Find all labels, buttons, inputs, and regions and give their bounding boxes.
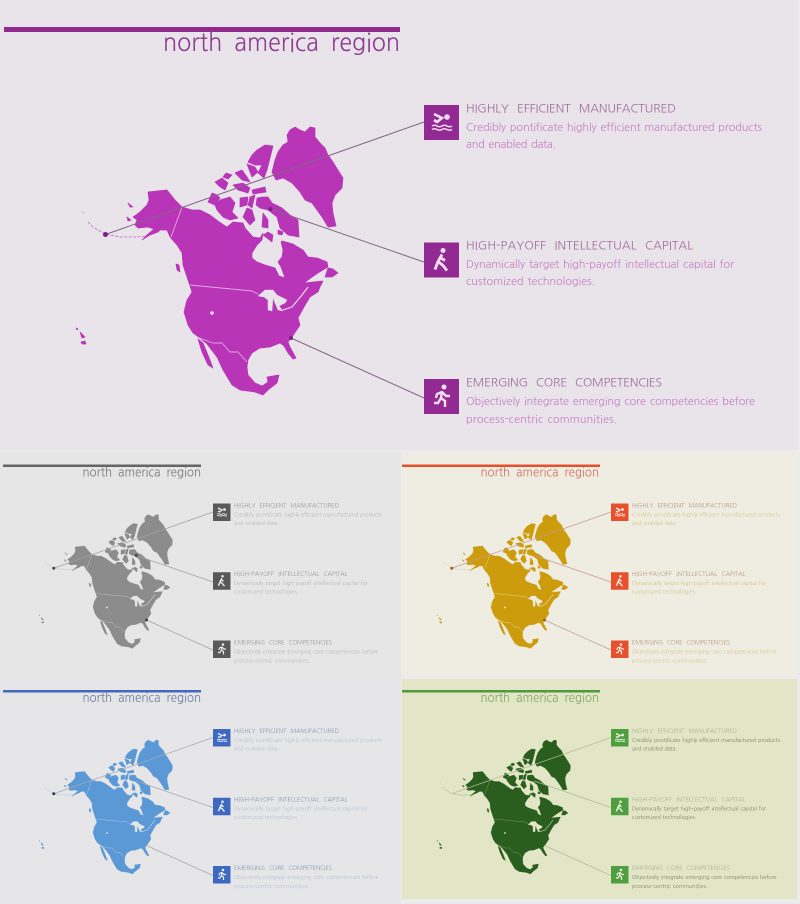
item: emerging core bbox=[213, 865, 378, 889]
item: high-payoff: HIGH-PAYOFF INTELLECTUAL CAPITAL bbox=[466, 240, 693, 252]
title: north america region bbox=[82, 691, 201, 704]
item: highly efficient: HIGHLY EFFICIENT MANUFACTURED bbox=[632, 728, 737, 734]
item: highly efficient: and enabled data. bbox=[632, 746, 677, 752]
item: high-payoff: customized technologies. bbox=[466, 276, 595, 287]
leader lines bbox=[452, 738, 611, 876]
item: emerging core bbox=[611, 639, 776, 664]
panel: blue bbox=[0, 678, 401, 904]
item: emerging core: Objectively integrate emerging core competencies before bbox=[234, 874, 378, 880]
item: emerging core: EMERGING CORE COMPETENCIES bbox=[234, 639, 332, 645]
item: emerging core: EMERGING CORE COMPETENCIES bbox=[466, 376, 662, 388]
leader lines bbox=[54, 512, 213, 650]
title: north america region bbox=[163, 30, 400, 55]
item: high-payoff: HIGH-PAYOFF INTELLECTUAL CAPITAL bbox=[632, 571, 746, 577]
item: emerging core: process-centric communities. bbox=[632, 883, 708, 889]
item: high-payoff bbox=[611, 796, 766, 820]
panel background bbox=[402, 453, 797, 675]
title bar bbox=[4, 27, 400, 32]
panel: green bbox=[402, 679, 797, 899]
item: high-payoff: Dynamically target high-payoff intellectual capital for bbox=[234, 806, 368, 812]
item: highly efficient: HIGHLY EFFICIENT MANUFACTURED bbox=[234, 728, 339, 734]
item: high-payoff bbox=[611, 571, 766, 594]
title: north america region bbox=[480, 691, 599, 704]
map bbox=[437, 514, 570, 648]
item: highly efficient: HIGHLY EFFICIENT MANUFACTURED bbox=[466, 102, 676, 114]
item: high-payoff: Dynamically target high-payoff intellectual capital for bbox=[632, 580, 766, 586]
item: high-payoff: customized technologies. bbox=[632, 588, 697, 594]
item: highly efficient: HIGHLY EFFICIENT MANUFACTURED bbox=[632, 502, 737, 508]
title bar bbox=[3, 690, 201, 692]
item: high-payoff: customized technologies. bbox=[234, 588, 299, 594]
item: highly efficient: and enabled data. bbox=[632, 520, 677, 526]
item: emerging core: Objectively integrate emerging core competencies before bbox=[632, 648, 776, 654]
leader dots bbox=[52, 554, 148, 622]
item: high-payoff bbox=[213, 571, 368, 594]
item: high-payoff: HIGH-PAYOFF INTELLECTUAL CAPITAL bbox=[632, 796, 746, 802]
title bar bbox=[402, 690, 600, 692]
leader dots bbox=[103, 207, 293, 340]
item: highly efficient: and enabled data. bbox=[466, 139, 556, 150]
item: emerging core: Objectively integrate emerging core competencies before bbox=[234, 648, 378, 654]
item: highly efficient: HIGHLY EFFICIENT MANUFACTURED bbox=[234, 502, 339, 508]
item: highly efficient: and enabled data. bbox=[234, 520, 279, 526]
item: emerging core: Objectively integrate emerging core competencies before bbox=[632, 874, 776, 880]
leader lines bbox=[452, 512, 611, 650]
item: emerging core bbox=[611, 865, 776, 889]
title: north america region bbox=[82, 466, 201, 478]
item: high-payoff: HIGH-PAYOFF INTELLECTUAL CAPITAL bbox=[234, 571, 348, 577]
item: emerging core: process-centric communities. bbox=[234, 883, 310, 889]
title: north america region bbox=[480, 466, 599, 478]
item: emerging core: process-centric communities. bbox=[466, 414, 617, 425]
panel background bbox=[0, 452, 401, 678]
item: highly efficient bbox=[611, 728, 781, 752]
leader dots bbox=[450, 567, 546, 622]
item: high-payoff: Dynamically target high-payoff intellectual capital for bbox=[632, 806, 766, 812]
item: high-payoff: Dynamically target high-payoff intellectual capital for bbox=[466, 259, 734, 270]
panel background bbox=[0, 678, 401, 904]
panel: purple main bbox=[0, 0, 798, 450]
panel: grey bbox=[0, 452, 401, 678]
item: emerging core: process-centric communities. bbox=[632, 658, 708, 664]
item: emerging core: EMERGING CORE COMPETENCIES bbox=[632, 639, 730, 645]
item: high-payoff bbox=[424, 240, 734, 287]
map bbox=[76, 127, 343, 395]
item: highly efficient: Credibly pontificate highly efficient manufactured products bbox=[466, 122, 762, 133]
leader lines bbox=[54, 738, 213, 876]
panel background bbox=[0, 0, 798, 450]
item: emerging core: EMERGING CORE COMPETENCIES bbox=[632, 865, 730, 871]
leader lines bbox=[106, 122, 424, 398]
item: highly efficient: Credibly pontificate highly efficient manufactured products bbox=[234, 737, 383, 743]
item: emerging core: EMERGING CORE COMPETENCIES bbox=[234, 865, 332, 871]
item: highly efficient bbox=[213, 728, 383, 752]
title bar bbox=[3, 464, 201, 467]
leader dots bbox=[52, 792, 55, 795]
map bbox=[39, 514, 172, 648]
panel background bbox=[402, 679, 797, 899]
item: highly efficient: Credibly pontificate highly efficient manufactured products bbox=[632, 737, 781, 743]
item: emerging core: process-centric communities. bbox=[234, 658, 310, 664]
title bar bbox=[402, 464, 600, 467]
item: highly efficient bbox=[611, 502, 781, 526]
item: high-payoff: customized technologies. bbox=[234, 814, 299, 820]
item: highly efficient: Credibly pontificate highly efficient manufactured products bbox=[632, 512, 781, 518]
map bbox=[39, 740, 172, 874]
item: high-payoff: customized technologies. bbox=[632, 814, 697, 820]
map bbox=[437, 740, 570, 874]
item: highly efficient bbox=[424, 102, 762, 150]
item: emerging core: Objectively integrate emerging core competencies before bbox=[466, 396, 755, 407]
item: emerging core bbox=[213, 639, 378, 664]
item: highly efficient bbox=[213, 502, 383, 526]
item: high-payoff: Dynamically target high-payoff intellectual capital for bbox=[234, 580, 368, 586]
item: highly efficient: and enabled data. bbox=[234, 746, 279, 752]
item: high-payoff: HIGH-PAYOFF INTELLECTUAL CAPITAL bbox=[234, 796, 348, 802]
item: high-payoff bbox=[213, 796, 368, 820]
item: emerging core bbox=[424, 376, 755, 425]
panel: orange bbox=[402, 453, 797, 675]
item: highly efficient: Credibly pontificate highly efficient manufactured products bbox=[234, 512, 383, 518]
